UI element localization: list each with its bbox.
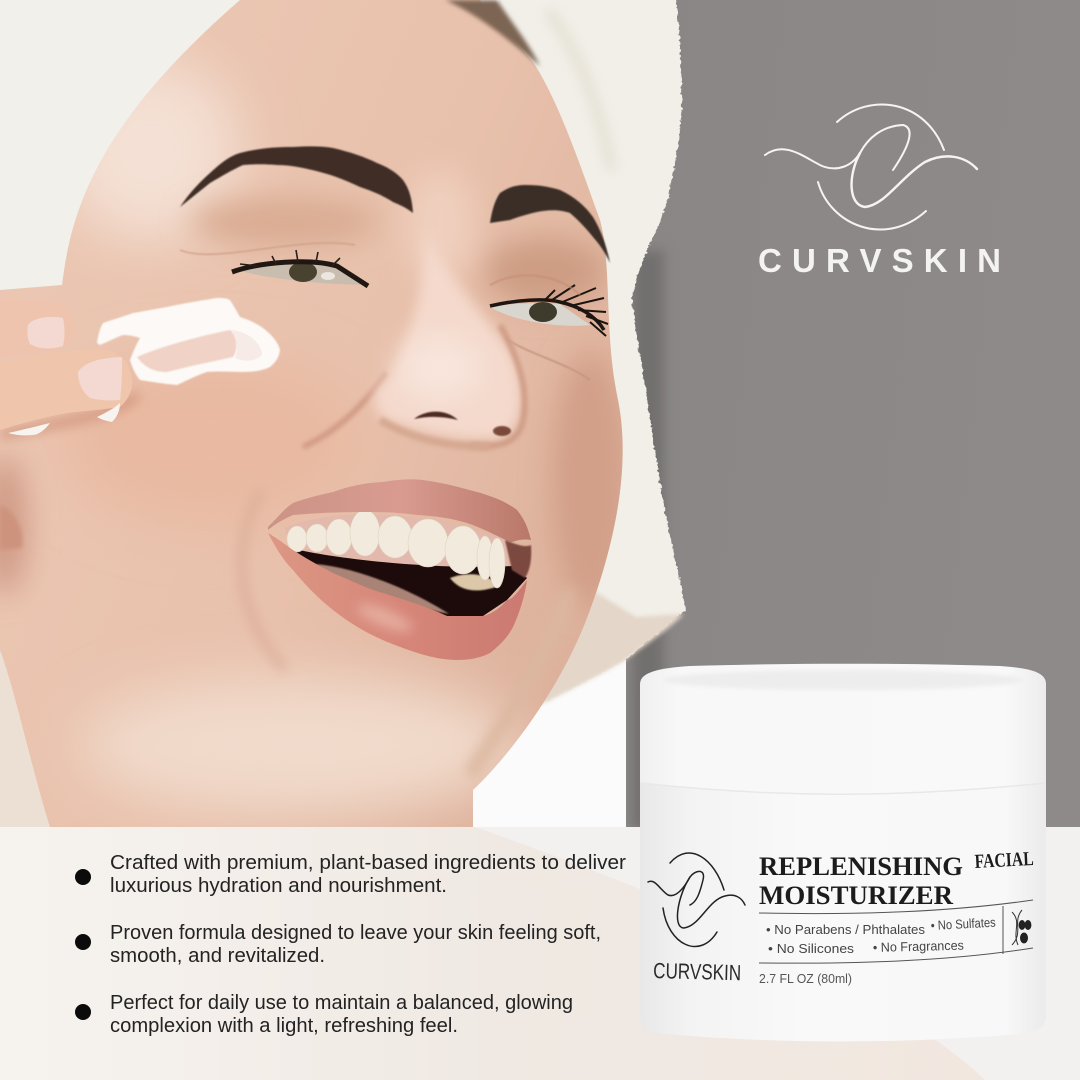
- gum: [285, 514, 510, 590]
- eye socket left: [190, 198, 380, 246]
- cream swipe: [8, 298, 280, 435]
- jar label logo: [648, 853, 745, 985]
- face: [0, 0, 623, 827]
- brand logo: top right: [758, 104, 1001, 279]
- smile crease left: [242, 490, 285, 670]
- hand: upper finger: [0, 300, 74, 358]
- benefit 2: Proven formula designed to leave your skin feeling soft,: [110, 922, 601, 944]
- jar lid: [640, 664, 1046, 794]
- jar body: [640, 783, 1046, 1042]
- towel fold: [548, 10, 612, 170]
- benefit 1: [75, 852, 626, 897]
- benefit 3: Perfect for daily use to maintain a balanced, glowing: [110, 992, 573, 1014]
- logo mark: [765, 104, 977, 230]
- jar label title: REPLENISHING: [759, 851, 963, 881]
- eye socket right: [483, 238, 607, 306]
- ear hint: [0, 505, 23, 550]
- benefit 3: [75, 992, 573, 1037]
- lid top recess: [663, 670, 1023, 690]
- tongue: [316, 564, 449, 614]
- towel patch lower-left: [0, 598, 14, 652]
- jar label claims: • No Silicones: [768, 941, 855, 956]
- jar label DNA icon: [1012, 910, 1031, 945]
- jar label claims: • No Fragrances: [873, 938, 965, 955]
- lower teeth: [450, 574, 499, 590]
- hair: [445, 0, 540, 66]
- benefit 1: Crafted with premium, plant-based ingredients to deliver: [110, 852, 626, 874]
- fingernails: [27, 317, 122, 400]
- left eye: [180, 243, 368, 286]
- nasolabial fold: [303, 373, 387, 447]
- jar label logo: CURVSKIN: [653, 958, 741, 985]
- mouth interior: [290, 548, 527, 616]
- product jar: [640, 664, 1046, 1042]
- nose light: [374, 230, 522, 439]
- hand: lower finger: [0, 350, 132, 430]
- cheek tone: [68, 372, 336, 516]
- upper lip: [268, 479, 531, 542]
- mouth: [268, 479, 531, 660]
- benefit 1: luxurious hydration and nourishment.: [110, 875, 447, 897]
- chin light: [80, 675, 520, 815]
- jar label title: [759, 848, 1034, 910]
- jaw shade right: [470, 590, 570, 775]
- mouth corner: [505, 540, 531, 578]
- nostril right: [493, 426, 511, 436]
- nose lower shade: [380, 420, 490, 446]
- nose tip highlight: [398, 336, 482, 400]
- finger shadow: [0, 395, 138, 435]
- logo wordmark: CURVSKIN: [758, 242, 1001, 279]
- nose: [374, 230, 525, 446]
- background: grey wall: [625, 0, 1080, 830]
- lower lip: [268, 533, 527, 660]
- jar label claims: • No Sulfates: [930, 915, 996, 933]
- towel underside: [540, 590, 684, 705]
- jar label title: FACIAL: [974, 848, 1034, 873]
- jar label title: MOISTURIZER: [759, 880, 954, 910]
- benefit 2: [75, 922, 601, 967]
- background: bright window: [473, 655, 626, 830]
- bottom panel: text background: [0, 827, 1080, 1080]
- cheek shade right: [552, 350, 628, 610]
- bright forehead: [60, 60, 240, 240]
- towel: [0, 0, 686, 740]
- jar label claims: • No Parabens / Phthalates: [766, 922, 926, 937]
- nose side shade: [470, 325, 525, 446]
- jar label claims: [766, 915, 996, 956]
- background: dark wall edge: [632, 250, 664, 830]
- benefit list: [75, 852, 626, 1037]
- right eye: [490, 275, 608, 380]
- jar label size: 2.7 FL OZ (80ml): [759, 971, 852, 986]
- upper teeth: [287, 510, 505, 588]
- left eyebrow: [180, 146, 413, 213]
- lid seam: [640, 783, 1046, 794]
- side shade left: [0, 455, 27, 595]
- photo: woman applying cream: [0, 0, 700, 830]
- inner eye light: [405, 170, 475, 280]
- nostril left: [414, 412, 458, 420]
- neck backdrop left: [0, 650, 60, 827]
- benefit 2: smooth, and revitalized.: [110, 945, 325, 967]
- lower lip highlight: [354, 599, 416, 637]
- right eyebrow: [490, 185, 610, 263]
- benefit 3: complexion with a light, refreshing feel.: [110, 1015, 458, 1037]
- jar label rules: [759, 900, 1033, 963]
